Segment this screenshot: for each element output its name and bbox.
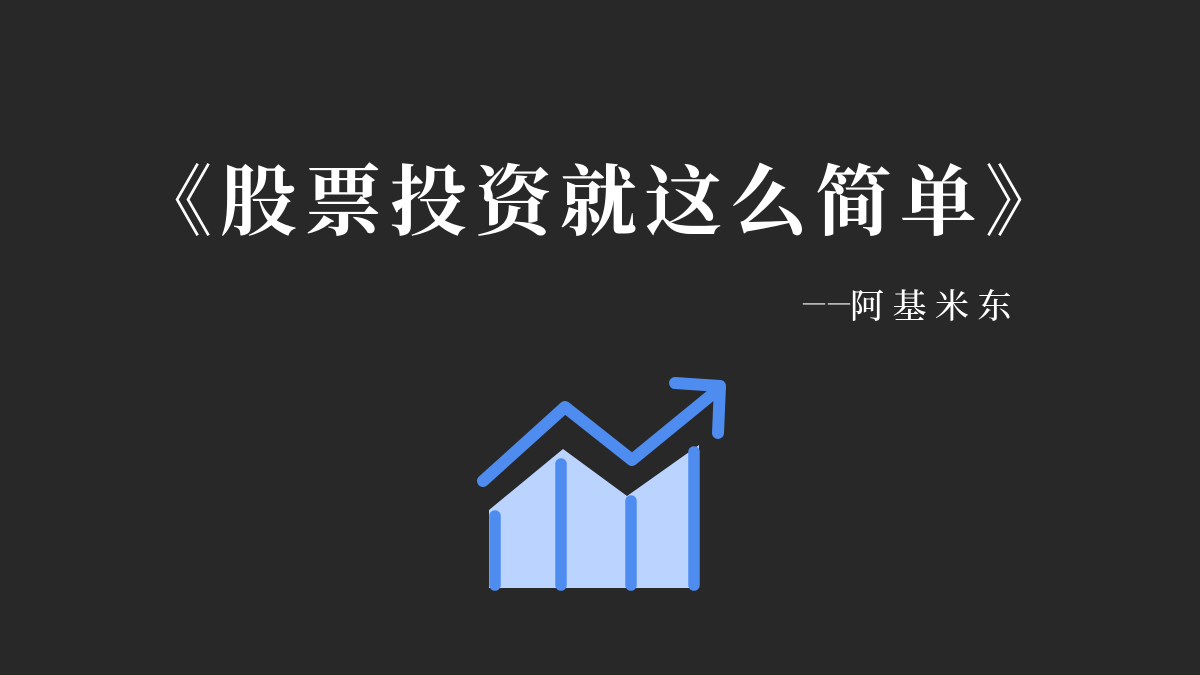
rising trend arrow bbox=[483, 383, 720, 481]
author byline: —— bbox=[803, 289, 853, 314]
vertical bars bbox=[495, 452, 694, 585]
light blue area under chart bbox=[489, 445, 699, 588]
author byline: 阿基米东 bbox=[850, 289, 1020, 326]
title: 《股票投资就这么简单》 bbox=[135, 160, 1070, 246]
